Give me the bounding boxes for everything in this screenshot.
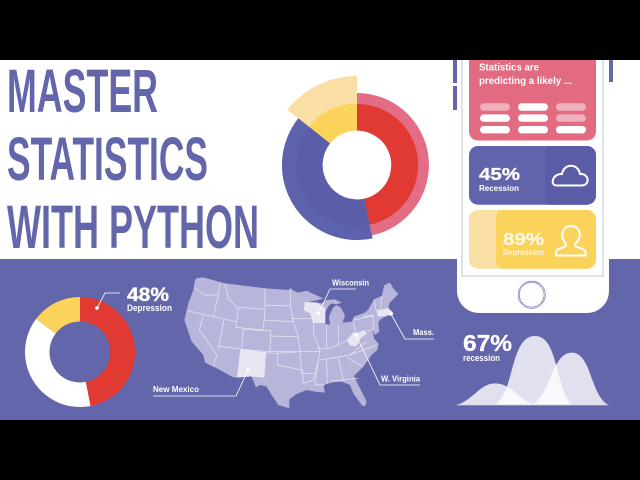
label: W. Virginia (354, 333, 421, 385)
phone (453, 60, 613, 313)
donut chart: depression (25, 293, 135, 407)
phone screen outline (462, 60, 603, 276)
label: New Mexico (153, 368, 250, 396)
state borders (188, 283, 382, 385)
icon: cloud (553, 166, 588, 186)
card: statistics: predicting a likely ... (479, 76, 572, 87)
card: statistics: Statistics are (479, 62, 539, 74)
highlighted states (237, 302, 393, 377)
card: depression: Depression (503, 247, 544, 257)
stat: 48% depression: Depression (127, 303, 172, 313)
stat: 67% recession: 67% (463, 330, 512, 356)
map outline (184, 277, 398, 408)
radial donut chart (282, 76, 429, 240)
phone side buttons (453, 60, 613, 110)
home button (518, 281, 545, 308)
label: New Mexico: New Mexico (153, 385, 199, 394)
card: recession: 45% (479, 164, 521, 184)
card: statistics (469, 60, 596, 140)
label: Mass. (389, 312, 434, 339)
title: MASTER (7, 57, 158, 125)
title: STATISTICS (7, 125, 208, 193)
label: Wisconsin: Wisconsin (332, 279, 369, 288)
card: recession: Recession (479, 183, 519, 193)
card: depression: 89% (503, 229, 545, 249)
title: WITH PYTHON (7, 193, 259, 261)
card: recession (469, 146, 596, 205)
icon: user (556, 226, 586, 256)
phone body (457, 60, 609, 313)
label: Wisconsin (317, 279, 369, 315)
card: depression (469, 210, 596, 269)
stat: 48% depression (127, 285, 172, 313)
title (7, 57, 259, 261)
stat: 48% depression: 48% (127, 285, 169, 306)
US map (184, 277, 398, 408)
label: W. Virginia: W. Virginia (381, 375, 421, 384)
stat: 67% recession: recession (463, 353, 500, 363)
distribution chart (457, 336, 608, 405)
label: Mass.: Mass. (413, 328, 434, 337)
